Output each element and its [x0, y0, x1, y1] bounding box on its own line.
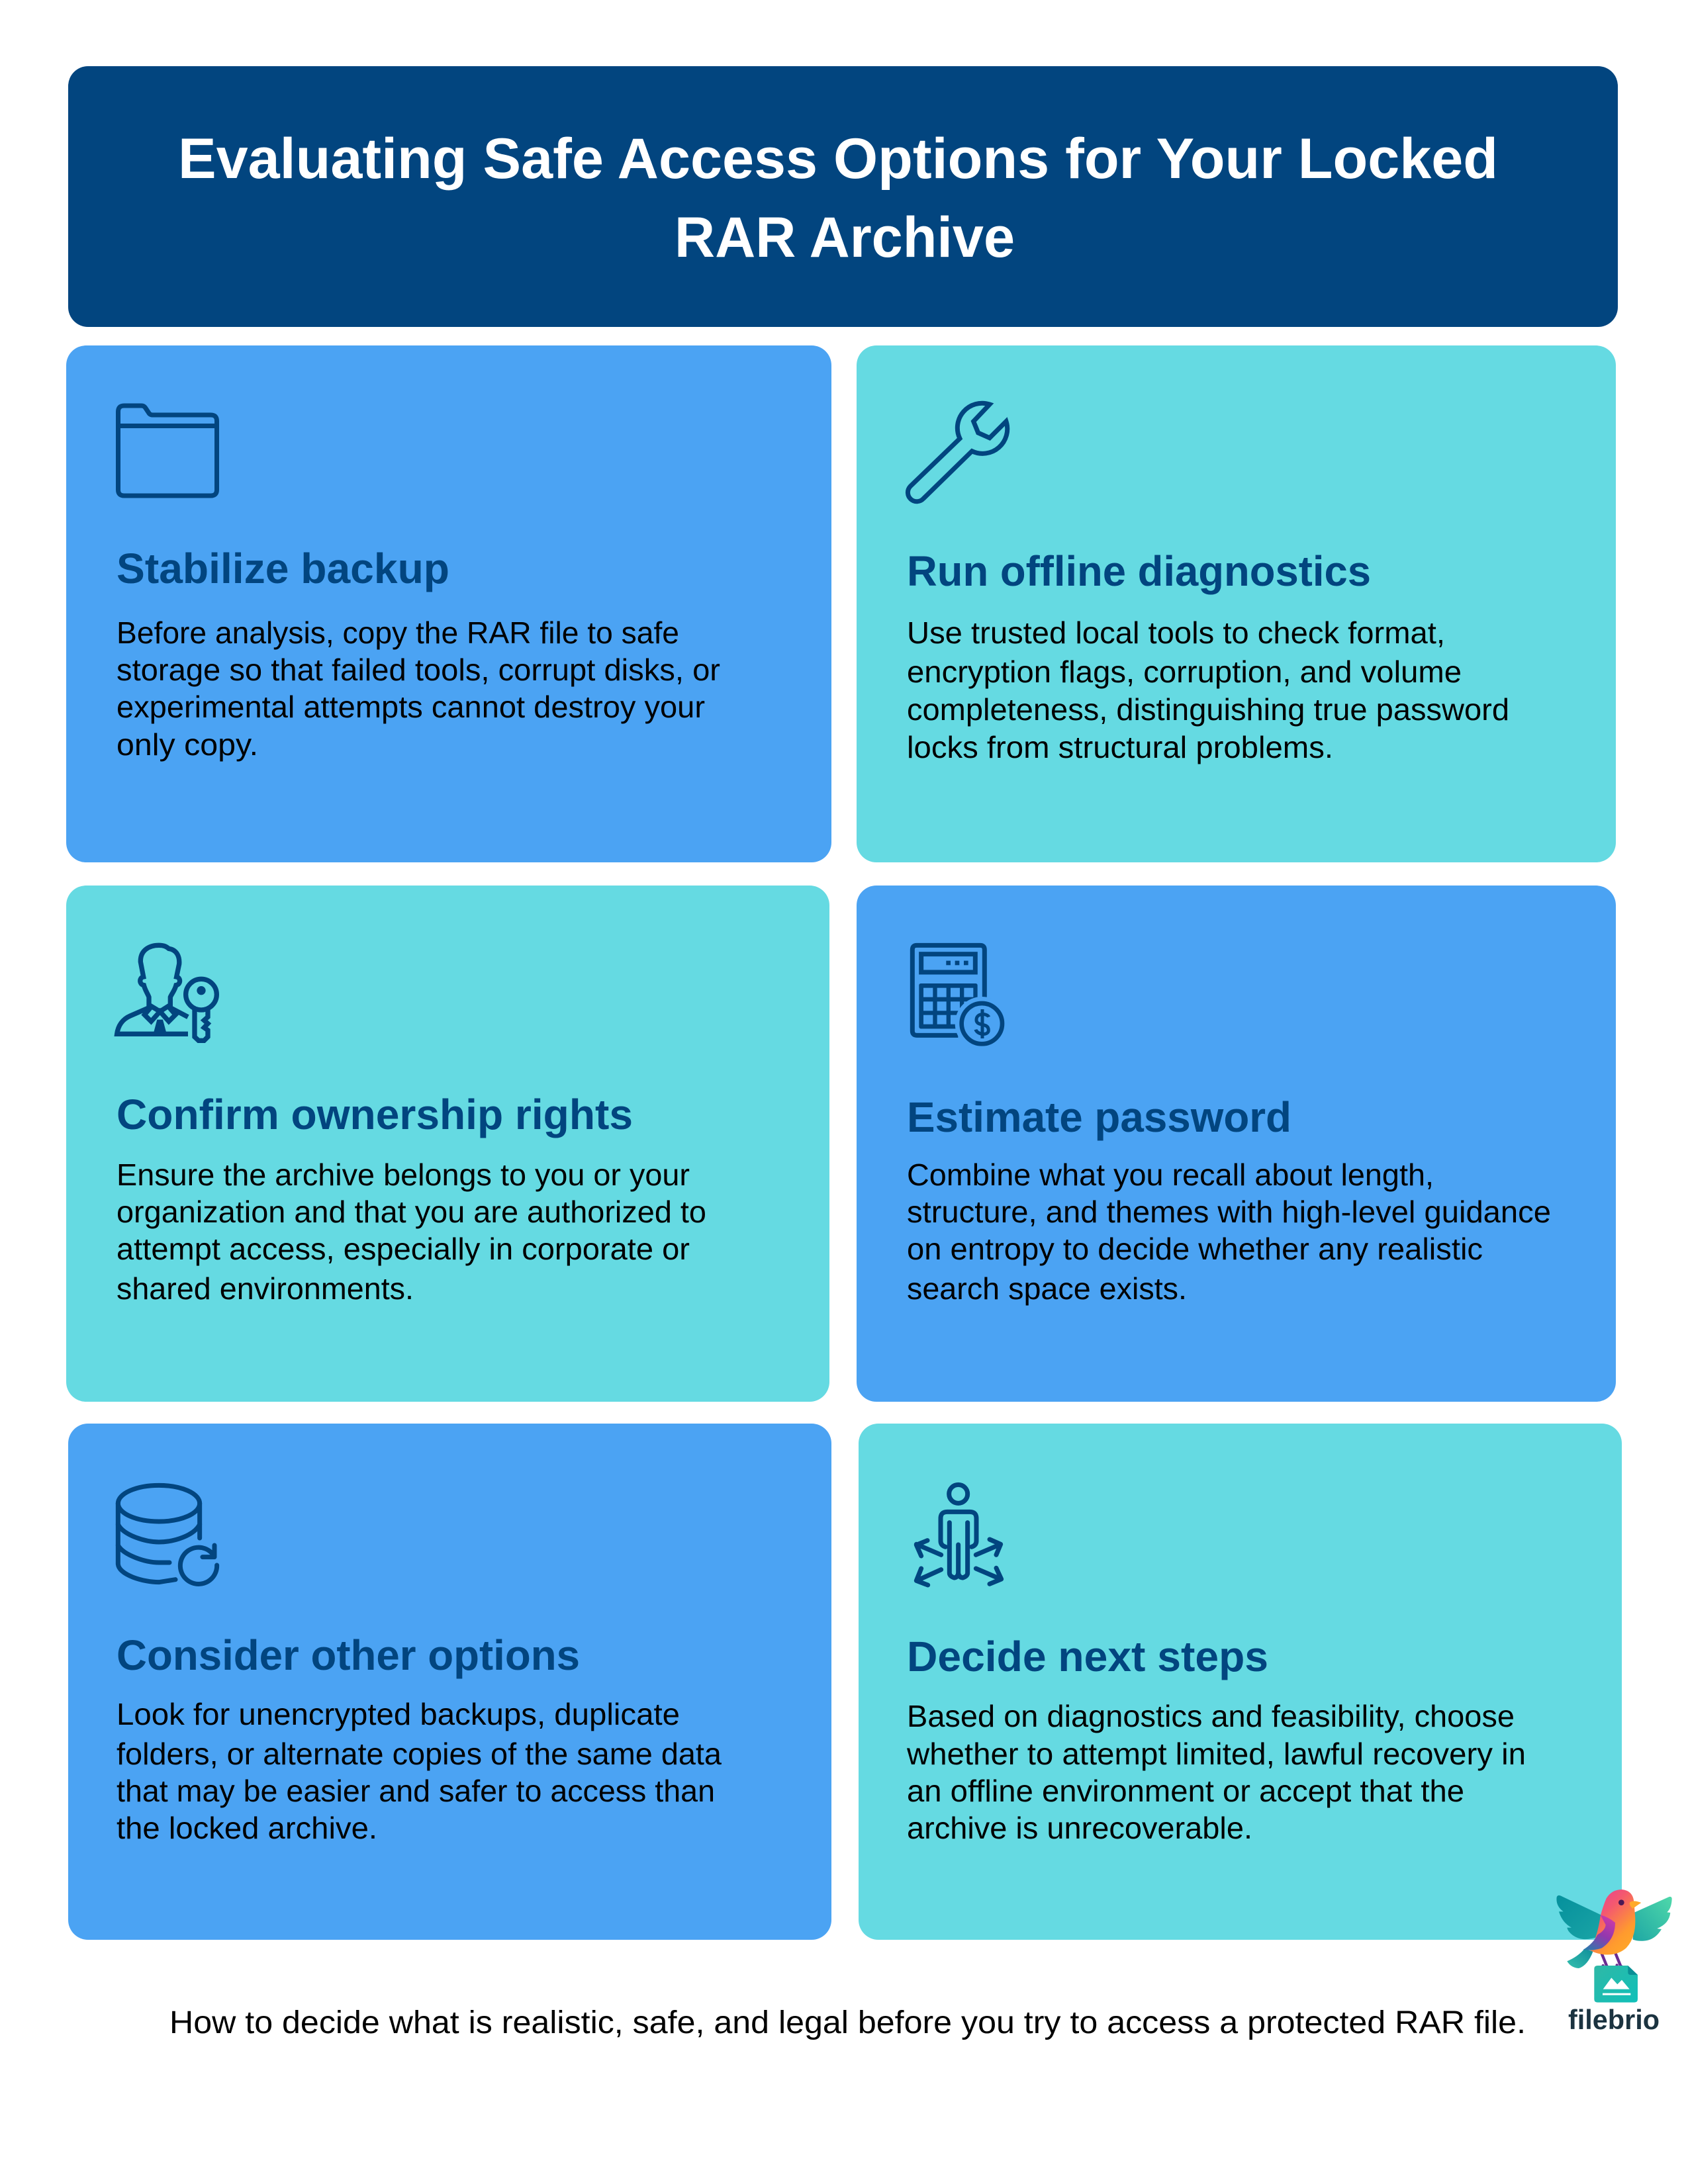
- body text: [117, 1158, 706, 1306]
- heading: Estimate password: [907, 1093, 1291, 1141]
- body text: storage so that failed tools, corrupt disks, or: [117, 653, 720, 687]
- body text: encryption flags, corruption, and volume: [907, 655, 1462, 689]
- footer caption: How to decide what is realistic, safe, and legal before you try to access a protected RAR file.: [169, 2005, 1526, 2040]
- body text: shared environments.: [117, 1271, 414, 1306]
- body text: archive is unrecoverable.: [907, 1811, 1252, 1845]
- panel: run offline diagnostics: [857, 345, 1616, 862]
- body text: Use trusted local tools to check format,: [907, 615, 1445, 650]
- body text: Ensure the archive belongs to you or your: [117, 1158, 690, 1192]
- body text: organization and that you are authorized to: [117, 1195, 706, 1229]
- icon: calculator with dollar: [912, 945, 1009, 1050]
- title text: RAR Archive: [675, 206, 1015, 269]
- body text: search space exists.: [907, 1271, 1187, 1306]
- body text: [906, 1699, 1526, 1845]
- body text: experimental attempts cannot destroy your: [117, 690, 705, 724]
- heading: Stabilize backup: [117, 545, 449, 592]
- icon: wrench: [908, 403, 1008, 502]
- body text: [117, 1697, 722, 1845]
- body text: folders, or alternate copies of the same data: [117, 1737, 722, 1771]
- body text: locks from structural problems.: [907, 730, 1333, 764]
- body text: the locked archive.: [117, 1811, 377, 1845]
- title text: Evaluating Safe Access Options for Your Locked: [178, 127, 1498, 191]
- body text: [907, 615, 1509, 764]
- icon: person with key: [117, 945, 216, 1040]
- heading: Decide next steps: [907, 1633, 1268, 1680]
- heading: Run offline diagnostics: [907, 547, 1371, 595]
- body text: only copy.: [117, 727, 258, 762]
- icon: person with arrows: [916, 1484, 1002, 1585]
- body text: Look for unencrypted backups, duplicate: [117, 1697, 680, 1731]
- logo: filebrio bird: [1556, 1889, 1672, 2035]
- panel: decide next steps: [859, 1424, 1622, 1940]
- body text: whether to attempt limited, lawful recovery in: [906, 1737, 1526, 1771]
- icon: folder: [118, 406, 217, 496]
- body text: completeness, distinguishing true password: [907, 692, 1509, 727]
- panel: estimate password: [857, 886, 1616, 1402]
- body text: structure, and themes with high-level guidance: [907, 1195, 1551, 1229]
- body text: that may be easier and safer to access than: [117, 1774, 715, 1808]
- icon: database with refresh: [118, 1485, 217, 1584]
- body text: on entropy to decide whether any realistic: [907, 1232, 1483, 1266]
- body text: [117, 615, 720, 762]
- body text: Based on diagnostics and feasibility, choose: [907, 1699, 1515, 1733]
- heading: Confirm ownership rights: [117, 1091, 633, 1138]
- body text: an offline environment or accept that the: [907, 1774, 1464, 1808]
- body text: Combine what you recall about length,: [907, 1158, 1434, 1192]
- panel: stabilize backup: [66, 345, 831, 862]
- title panel: [68, 66, 1618, 327]
- panel: confirm ownership rights: [66, 886, 829, 1402]
- body text: Before analysis, copy the RAR file to safe: [117, 615, 679, 650]
- title text: [178, 127, 1498, 269]
- body text: attempt access, especially in corporate or: [117, 1232, 690, 1266]
- logo wordmark: filebrio: [1568, 2004, 1660, 2035]
- body text: [907, 1158, 1551, 1306]
- heading: Consider other options: [117, 1631, 580, 1679]
- panel: consider other options: [68, 1424, 831, 1940]
